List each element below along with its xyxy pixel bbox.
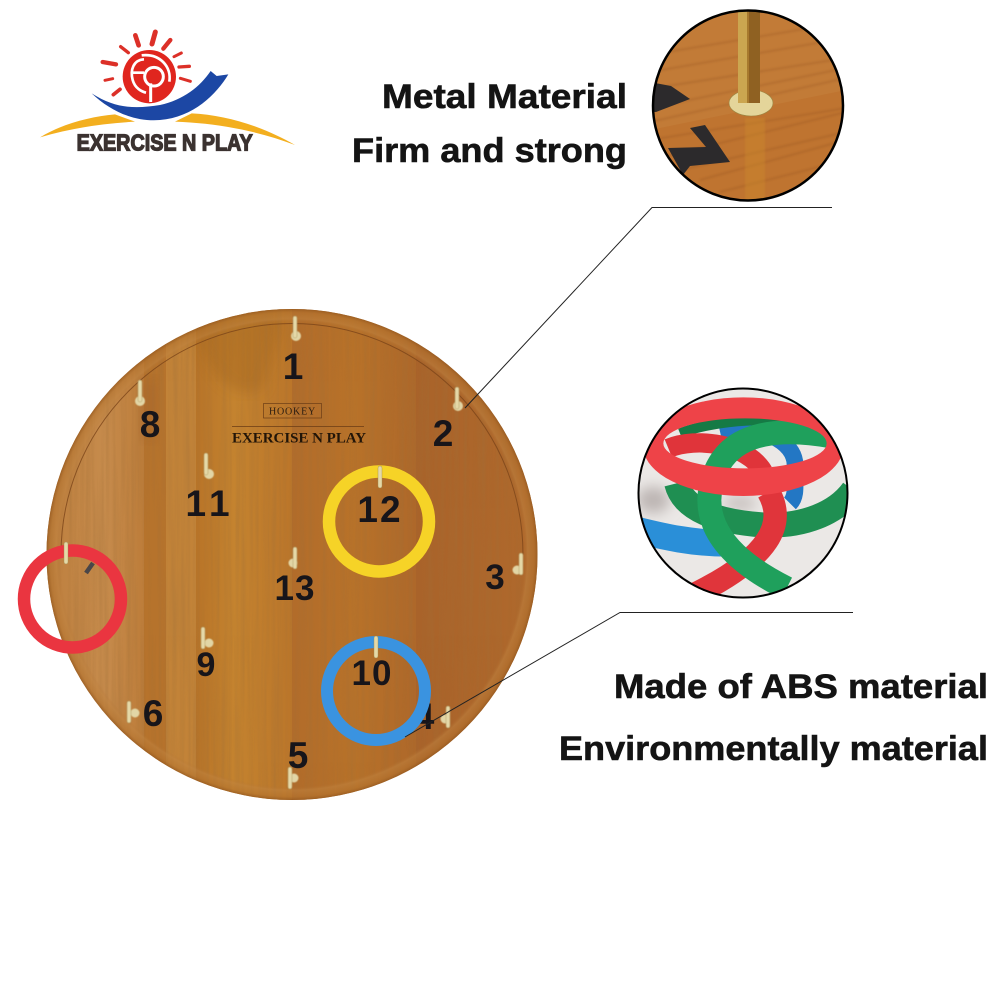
number 12: 12 (357, 489, 403, 530)
photo circle: coloured ABS rings closeup (638, 388, 848, 598)
number 13: 13 (275, 569, 315, 608)
board label: hookey: HOOKEY (269, 406, 316, 418)
icon: red sun (123, 50, 176, 103)
photo circle: brass peg closeup (650, 8, 846, 204)
number 11: 11 (185, 483, 235, 524)
icon: sun rays (103, 32, 190, 95)
number 3: 3 (485, 558, 505, 597)
number 4: 4 (414, 696, 435, 737)
text: firm and strong: Firm and strong (352, 132, 627, 170)
product: wooden hookey board (24, 308, 538, 802)
number 5: 5 (288, 735, 308, 776)
red front ring (643, 397, 843, 496)
number 2: 2 (433, 413, 453, 454)
number 6: 6 (143, 693, 163, 734)
logo wordmark: EXERCISE N PLAY (77, 130, 253, 156)
text: environmentally material: Environmentally material (559, 730, 988, 768)
hooks on the board (127, 316, 523, 789)
number 7: mostly hidden behind the red ring (86, 563, 93, 573)
number 10: 10 (352, 654, 392, 693)
board wood surface (46, 308, 538, 802)
green back ring (677, 483, 853, 525)
heading: made of ABS material: Made of ABS material (614, 668, 988, 706)
callout line: metal peg (465, 208, 832, 408)
callout line: abs rings (405, 612, 853, 737)
board label: hookey (264, 404, 322, 418)
number 9: 9 (197, 646, 215, 684)
logo: Exercise N Play (40, 32, 295, 156)
red back ring (668, 443, 763, 472)
number 8: 8 (140, 404, 160, 445)
ring: yellow on hook 12 (329, 466, 429, 572)
heading: metal material: Metal Material (382, 78, 627, 116)
icon: blue swoosh (92, 71, 228, 120)
ring: blue on hook 10 (327, 636, 425, 740)
ring: red on hook 7 (24, 542, 121, 648)
number 1: 1 (283, 346, 303, 387)
board label: exercise n play: EXERCISE N PLAY (232, 430, 367, 446)
blue ring (637, 530, 727, 543)
icon: yellow arcs (40, 113, 295, 145)
green front ring (709, 432, 833, 588)
